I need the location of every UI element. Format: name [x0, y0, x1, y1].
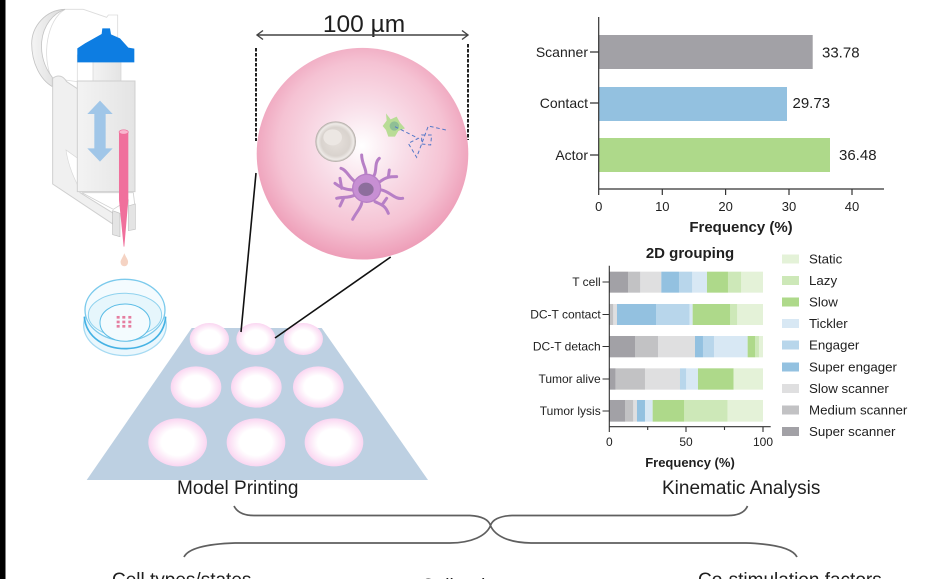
tick labels: 20	[718, 199, 733, 214]
tick labels: 0	[606, 435, 613, 449]
row labels: DC-T contact	[530, 308, 601, 322]
printer arm inner highlight	[66, 150, 80, 190]
tick labels	[595, 199, 859, 214]
stacked bar chart: 2D grouping	[530, 245, 773, 470]
icon: bioprinter head	[32, 9, 135, 266]
zoom lines	[241, 173, 391, 338]
category labels: Actor	[555, 147, 588, 163]
needle opening	[119, 130, 128, 134]
Tumor alive stack	[609, 368, 763, 390]
legend: Lazy	[809, 273, 837, 288]
printer top frame	[47, 9, 118, 82]
category labels: Scanner	[536, 44, 588, 60]
dish body	[85, 279, 165, 341]
axes	[602, 266, 771, 432]
row labels: DC-T detach	[533, 340, 601, 354]
bar chart: category frequency	[536, 17, 884, 236]
scanner bar	[599, 35, 813, 69]
dish well	[100, 304, 150, 341]
blue plunger cap	[77, 28, 134, 62]
value labels: 36.48	[839, 147, 877, 164]
Tumor lysis stack	[609, 400, 763, 422]
tumor organoid sphere	[257, 48, 468, 260]
droplet	[121, 253, 128, 266]
row labels: Tumor alive	[538, 372, 601, 386]
printer arm	[53, 76, 113, 224]
value labels	[792, 44, 877, 164]
value labels: 29.73	[792, 95, 830, 112]
printed model plate	[87, 323, 428, 480]
printer cartridge crescent	[32, 9, 65, 87]
back row wells	[190, 323, 323, 355]
dashed guides	[256, 44, 468, 141]
double-headed arrow	[87, 101, 113, 162]
pink needle	[119, 132, 128, 247]
icon: petri dish	[84, 279, 166, 356]
legend	[782, 252, 908, 439]
value labels: 33.78	[822, 44, 860, 62]
curly braces	[184, 506, 797, 557]
dimension arrow	[257, 30, 468, 40]
tick labels	[606, 435, 773, 449]
legend: Super scanner	[809, 424, 896, 439]
needle clamps	[113, 211, 120, 237]
tick labels: 100	[753, 435, 773, 449]
row labels: Tumor lysis	[540, 404, 601, 418]
actor bar	[599, 138, 830, 172]
dish lower rim	[84, 317, 166, 349]
legend: Slow	[809, 294, 838, 310]
migration path	[395, 126, 446, 157]
printer body	[77, 81, 135, 192]
legend: Slow scanner	[809, 381, 889, 396]
dendritic cell	[335, 155, 403, 219]
scale label: 100 µm	[323, 11, 405, 38]
legend: Tickler	[809, 316, 848, 331]
legend: Static	[809, 252, 843, 266]
rear clamp	[128, 204, 135, 231]
category labels: Contact	[540, 95, 588, 111]
category labels	[536, 44, 588, 163]
tick labels: 10	[655, 199, 670, 214]
middle row wells	[171, 366, 344, 408]
T cell	[316, 122, 356, 162]
tick labels: 40	[845, 199, 859, 214]
legend: Engager	[809, 338, 860, 352]
chart title: 2D grouping	[646, 245, 734, 262]
row labels: T cell	[572, 275, 601, 289]
row labels	[530, 275, 601, 418]
legend: Super engager	[809, 360, 898, 374]
printer neck	[93, 62, 121, 82]
axis title: Frequency (%)	[645, 455, 735, 470]
left edge strip	[0, 0, 6, 579]
dish base	[84, 294, 166, 356]
contact bar	[599, 87, 787, 121]
green tumor cell	[383, 113, 405, 137]
tick labels: 50	[679, 435, 693, 449]
DC-T contact stack	[609, 304, 763, 325]
tick labels: 0	[595, 199, 602, 214]
legend: Medium scanner	[809, 402, 908, 418]
T cell stack	[609, 272, 763, 293]
printed dots	[117, 316, 131, 328]
DC-T detach stack	[609, 336, 763, 357]
front row wells	[148, 418, 363, 466]
dish inner rim	[88, 293, 162, 337]
axis title: Frequency (%)	[689, 219, 793, 236]
tick labels: 30	[782, 199, 796, 214]
section label: kinematic analysis: Kinematic Analysis	[662, 478, 820, 499]
section label: model printing: Model Printing	[177, 478, 298, 499]
printer lower support	[82, 193, 135, 209]
axes	[590, 17, 884, 195]
